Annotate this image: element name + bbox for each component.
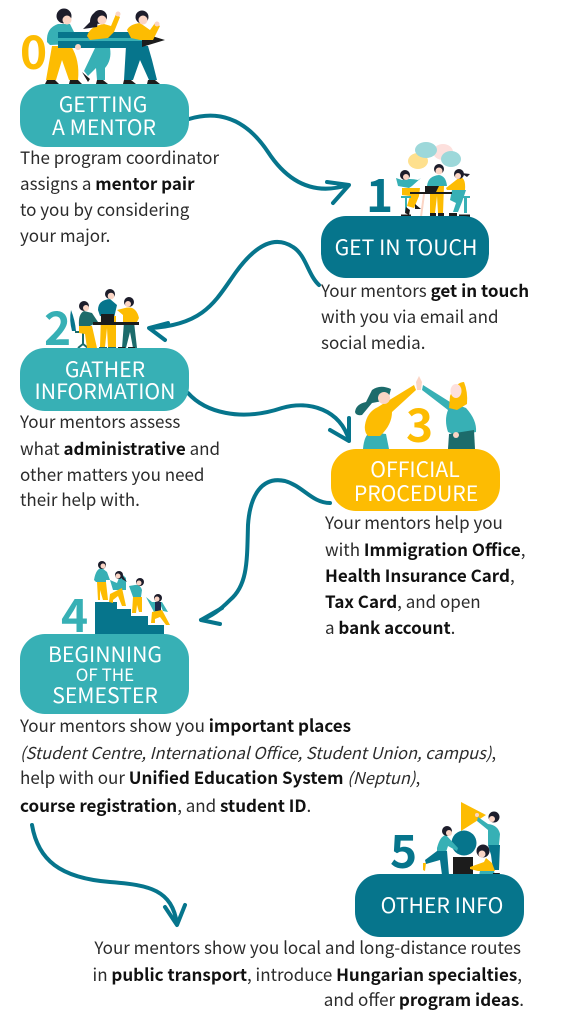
- text: step 2 description: other matters you need: [20, 461, 204, 486]
- icon: people climbing stairs: [94, 561, 170, 634]
- step 5: [93, 802, 524, 1011]
- text: step 2 description: Your mentors assess: [19, 408, 180, 433]
- icon: people arranging shapes: [423, 802, 500, 879]
- icon: two women high-five: [355, 376, 476, 449]
- text: step 4 description: Your mentors show you important places: [20, 712, 351, 737]
- step 4: [19, 561, 496, 817]
- text: step 4 description: (Student Centre, International Office, Student Union, campus),: [20, 739, 496, 764]
- text: step 3 description: a bank account.: [325, 614, 455, 639]
- pill: gather information: [20, 348, 189, 411]
- text: step 0 description: your major.: [20, 222, 110, 247]
- text: step 2 description: their help with.: [20, 486, 140, 511]
- pill: official procedure: OFFICIAL: [370, 453, 460, 484]
- pill: beginning of the semester: OF THE: [76, 661, 134, 686]
- step 3: [324, 376, 525, 639]
- text: step 3 description: Tax Card, and open: [325, 588, 481, 613]
- text: step 2 description: what administrative and: [20, 435, 220, 460]
- number 0: 0: [20, 17, 47, 83]
- number 1: 1: [366, 160, 393, 226]
- text: step 1 description: Your mentors get in touch: [321, 277, 529, 302]
- pill: get in touch: GET IN TOUCH: [335, 231, 477, 262]
- text: step 5 description: in public transport, introduce Hungarian specialties,: [93, 961, 522, 986]
- text: step 3 description: with Immigration Office,: [325, 536, 525, 561]
- number 3: 3: [406, 390, 433, 456]
- arrow: step 0 to step 1: [189, 116, 349, 203]
- text: step 3 description: Your mentors help you: [324, 509, 503, 534]
- pill: getting a mentor: GETTING: [59, 88, 147, 119]
- step 2: [19, 289, 220, 511]
- pill: getting a mentor: [20, 84, 189, 147]
- text: step 4 description: course registration, and student ID.: [20, 792, 311, 817]
- text: step 0 description: The program coordinator: [20, 144, 219, 169]
- step 1: [320, 142, 529, 354]
- arrow: step 2 to step 3: [188, 393, 349, 441]
- text: step 5 description: Your mentors show you local and long-distance routes: [93, 934, 521, 959]
- text: step 1 description: with you via email and: [321, 303, 498, 328]
- icon: three people around a laptop: [70, 289, 139, 351]
- text: step 5 description: and offer program ideas.: [324, 986, 524, 1011]
- pill: other info: [355, 874, 524, 937]
- pill: beginning of the semester: BEGINNING: [48, 638, 162, 669]
- arrow: step 1 to step 2: [149, 242, 319, 340]
- pill: get in touch: [321, 216, 489, 278]
- pill: other info: OTHER INFO: [381, 889, 503, 920]
- text: step 3 description: Health Insurance Card,: [325, 562, 515, 587]
- text: step 4 description: help with our Unified Education System (Neptun),: [20, 764, 420, 789]
- text: step 0 description: to you by considering: [20, 196, 190, 221]
- step 0: [20, 8, 219, 247]
- arrow: step 4 to step 5: [32, 825, 185, 925]
- pill: gather information: INFORMATION: [35, 375, 175, 406]
- pill: beginning of the semester: SEMESTER: [52, 679, 158, 710]
- number 4: 4: [61, 580, 88, 646]
- text: step 1 description: social media.: [321, 329, 425, 354]
- pill: gather information: GATHER: [65, 353, 145, 384]
- arrow: step 3 to step 4: [201, 480, 330, 624]
- pill: getting a mentor: A MENTOR: [52, 111, 156, 142]
- icon: people talking at a table: [396, 142, 470, 217]
- pill: beginning of the semester: [20, 634, 189, 714]
- number 2: 2: [44, 293, 71, 359]
- pill: official procedure: PROCEDURE: [354, 477, 478, 508]
- number 5: 5: [390, 816, 417, 882]
- pill: official procedure: [331, 449, 500, 511]
- icon: three people carrying a pencil: [45, 8, 165, 84]
- text: step 0 description: assigns a mentor pair: [20, 170, 195, 195]
